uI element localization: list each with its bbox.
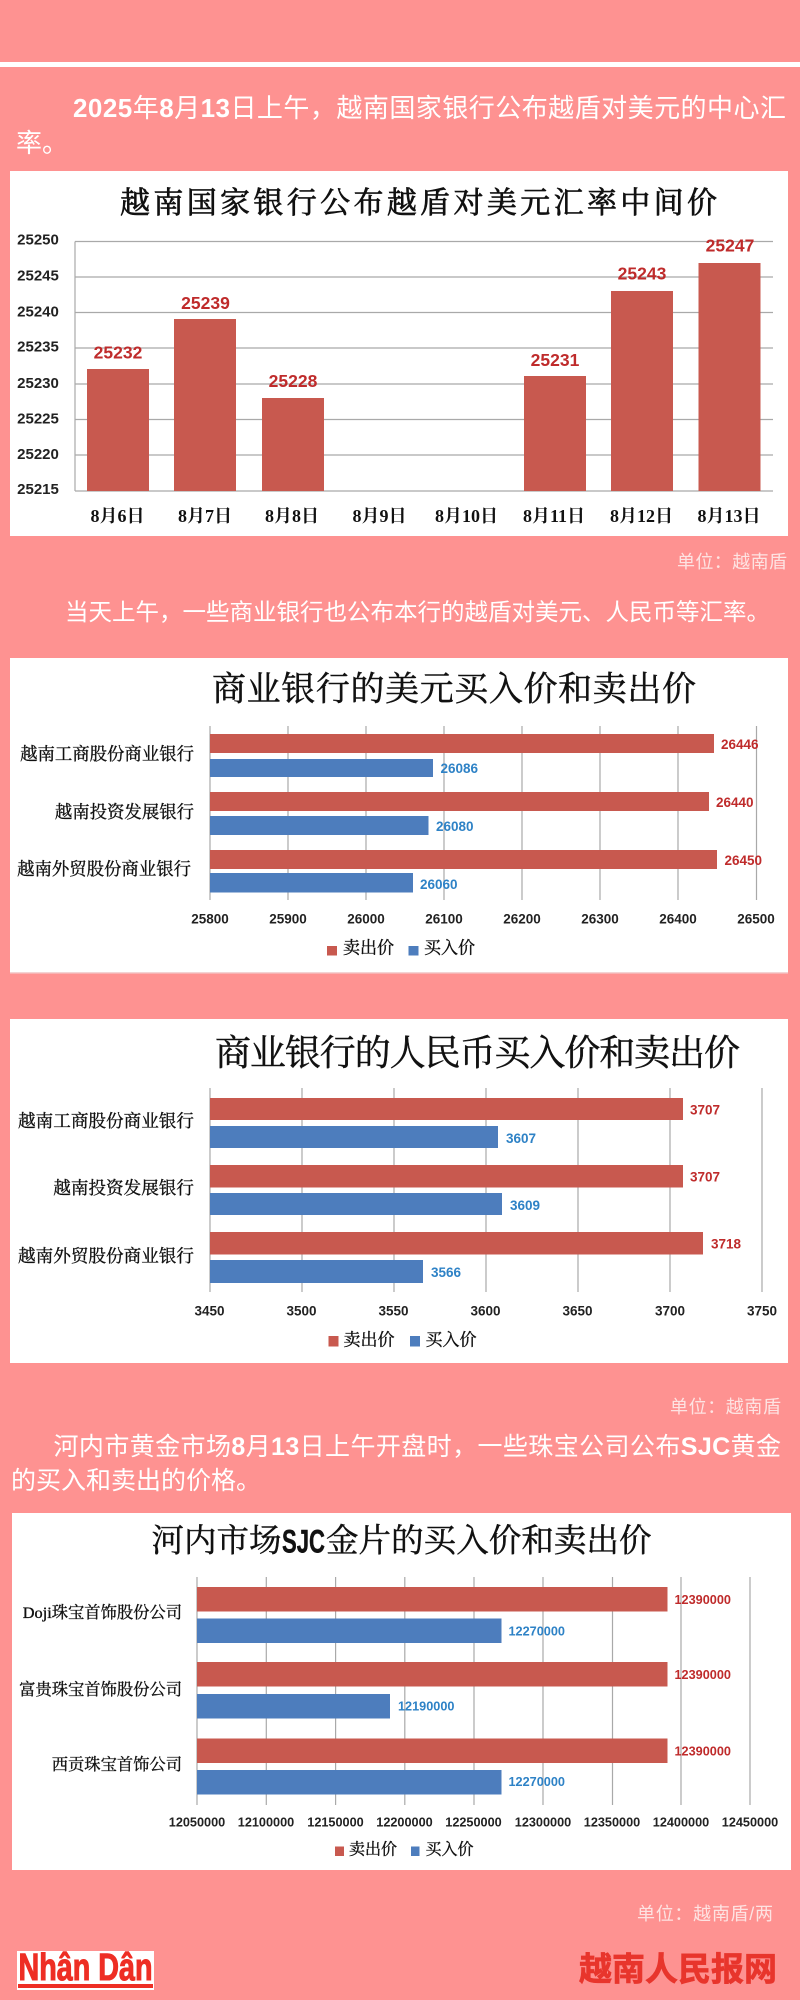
x axis labels: 3750 [747, 1304, 777, 1318]
bank labels: 越南工商股份商业银行 [20, 744, 194, 764]
heading: RMB chart title: 商业银行的人民币买入价和卖出价 [215, 1033, 740, 1073]
bank labels [18, 1111, 194, 1266]
y axis labels: 25230 [17, 375, 59, 392]
panel: RMB buy and sell chart [10, 1019, 788, 1363]
value labels [398, 1593, 731, 1789]
value labels: 12270000 [508, 1624, 565, 1638]
y axis labels: 25250 [17, 232, 59, 248]
x axis labels: 3500 [286, 1304, 317, 1318]
y axis labels: 25215 [17, 481, 59, 498]
chart: USD bars [210, 726, 756, 900]
brand: website name: 越南人民报网 [579, 1950, 777, 1988]
bank labels [17, 744, 194, 879]
bank labels: 越南工商股份商业银行 [18, 1111, 194, 1131]
x axis labels: 26400 [659, 912, 697, 926]
x axis labels: 25900 [269, 912, 307, 926]
chart: gridlines and bars [75, 242, 773, 491]
heading: gold chart title: 金片的买入价和卖出价 [326, 1522, 652, 1560]
legend [327, 938, 475, 958]
x axis labels: 12150000 [307, 1816, 364, 1830]
heading: USD chart title: 商业银行的美元买入价和卖出价 [212, 670, 696, 708]
y axis labels: 25245 [17, 268, 59, 284]
heading: central rate chart title: 越南国家银行公布越盾对美元汇率中间价 [120, 187, 717, 220]
value labels: 25228 [269, 371, 318, 391]
company labels: Doji珠宝首饰股份公司 [23, 1603, 182, 1622]
x axis labels [169, 1816, 778, 1830]
value labels: 26060 [420, 877, 458, 892]
value labels: 12390000 [674, 1668, 731, 1682]
value labels: 12390000 [674, 1744, 731, 1758]
x axis labels: 8月8日 [265, 506, 319, 526]
value labels: 25247 [706, 236, 754, 256]
x axis labels: 8月11日 [523, 506, 585, 526]
value labels: 3718 [711, 1236, 742, 1252]
x axis labels: 8月13日 [698, 506, 760, 526]
y axis labels [17, 232, 59, 498]
x axis labels [90, 506, 760, 526]
value labels: 26446 [721, 737, 759, 752]
x axis labels: 3650 [562, 1304, 593, 1318]
x axis labels: 12250000 [445, 1816, 502, 1830]
chart: gold bars [197, 1577, 750, 1805]
value labels: 12390000 [674, 1593, 731, 1607]
x axis labels: 3550 [378, 1304, 409, 1318]
x axis labels: 26500 [737, 912, 775, 926]
x axis labels: 26100 [425, 912, 463, 926]
chart: RMB bars [210, 1088, 762, 1292]
panel: SJC gold buy and sell chart [12, 1513, 791, 1870]
value labels: 25239 [181, 293, 230, 313]
x axis labels: 26000 [347, 912, 385, 926]
company labels: 富贵珠宝首饰股份公司 [19, 1680, 182, 1699]
legend: 卖出价 [343, 938, 394, 958]
x axis labels: 3450 [194, 1304, 225, 1318]
bank labels: 越南外贸股份商业银行 [17, 859, 191, 879]
legend: 买入价 [426, 1330, 476, 1350]
x axis labels: 26300 [581, 912, 619, 926]
value labels [420, 737, 762, 892]
text block: gold market paragraph: 河内市黄金市场8月13日上午开盘时，一些珠宝公司公布SJC黄金 [54, 1433, 781, 1461]
value labels: 26450 [724, 853, 762, 868]
value labels: 25232 [94, 342, 143, 362]
panel: USD buy and sell chart [10, 658, 788, 974]
y axis labels: 25240 [17, 304, 59, 320]
value labels: 3707 [690, 1170, 720, 1184]
unit note 2: 单位：越南盾 [670, 1397, 781, 1417]
y axis labels: 25235 [17, 338, 59, 356]
y axis labels: 25220 [17, 446, 59, 463]
x axis labels: 12350000 [584, 1816, 640, 1830]
legend: 买入价 [426, 1840, 474, 1858]
x axis labels [191, 912, 775, 926]
x axis labels: 12300000 [515, 1816, 571, 1830]
value labels: 26080 [436, 819, 474, 834]
x axis labels: 12450000 [722, 1816, 778, 1830]
value labels [94, 236, 754, 391]
value labels: 3609 [510, 1198, 540, 1213]
x axis labels: 12400000 [653, 1816, 709, 1830]
value labels: 12270000 [508, 1775, 565, 1789]
x axis labels: 26200 [503, 912, 541, 926]
value labels: 26086 [440, 761, 479, 776]
unit note 1: 单位：越南盾 [677, 552, 787, 572]
value labels: 26440 [716, 795, 754, 810]
value labels [431, 1102, 742, 1280]
value labels: 25231 [531, 350, 580, 370]
legend: 卖出价 [349, 1840, 397, 1858]
x axis labels [194, 1304, 777, 1318]
x axis labels: 25800 [191, 912, 229, 926]
legend [328, 1330, 476, 1350]
x axis labels: 12100000 [238, 1816, 294, 1830]
heading: gold chart title: SJC [282, 1524, 325, 1560]
x axis labels: 8月7日 [178, 506, 232, 526]
x axis labels: 12200000 [376, 1816, 433, 1830]
value labels: 3707 [690, 1102, 720, 1118]
company labels [19, 1603, 182, 1774]
x axis labels: 12050000 [169, 1816, 225, 1830]
y axis labels: 25225 [17, 410, 59, 428]
text block: intro paragraph: 2025年8月13日上午，越南国家银行公布越盾对美元的中心汇 [73, 93, 786, 123]
value labels: 3607 [506, 1131, 536, 1146]
unit note 3: 单位：越南盾/两 [637, 1904, 773, 1924]
company labels: 西贡珠宝首饰公司 [52, 1755, 182, 1774]
x axis labels: 3700 [655, 1304, 685, 1318]
x axis labels: 8月12日 [610, 506, 673, 526]
heading: gold chart title: 河内市场 [152, 1522, 282, 1560]
panel: central rate column chart [10, 171, 788, 536]
x axis labels: 8月6日 [90, 506, 144, 526]
legend: 买入价 [424, 938, 475, 958]
text block: intro paragraph: 率。 [16, 128, 68, 158]
legend [335, 1840, 474, 1858]
bank labels: 越南外贸股份商业银行 [18, 1246, 194, 1266]
bank labels: 越南投资发展银行 [53, 1178, 194, 1198]
text block: commercial banks paragraph: 当天上午，一些商业银行也公布本行的越盾对美元、人民币等汇率。 [65, 599, 770, 625]
text block: intro paragraph [16, 93, 786, 158]
value labels: 25243 [618, 264, 667, 284]
value labels: 3566 [431, 1265, 462, 1280]
value labels: 12190000 [398, 1700, 454, 1714]
bank labels: 越南投资发展银行 [55, 802, 194, 822]
x axis labels: 3600 [470, 1304, 501, 1318]
text block: gold market paragraph [11, 1433, 781, 1495]
x axis labels: 8月9日 [352, 506, 406, 526]
logo: Nhan Dan: Nhân Dân [18, 1947, 152, 1989]
text block: gold market paragraph: 的买入和卖出的价格。 [11, 1467, 261, 1495]
heading: gold chart title [152, 1522, 652, 1560]
x axis labels: 8月10日 [435, 506, 498, 526]
legend: 卖出价 [344, 1330, 394, 1350]
